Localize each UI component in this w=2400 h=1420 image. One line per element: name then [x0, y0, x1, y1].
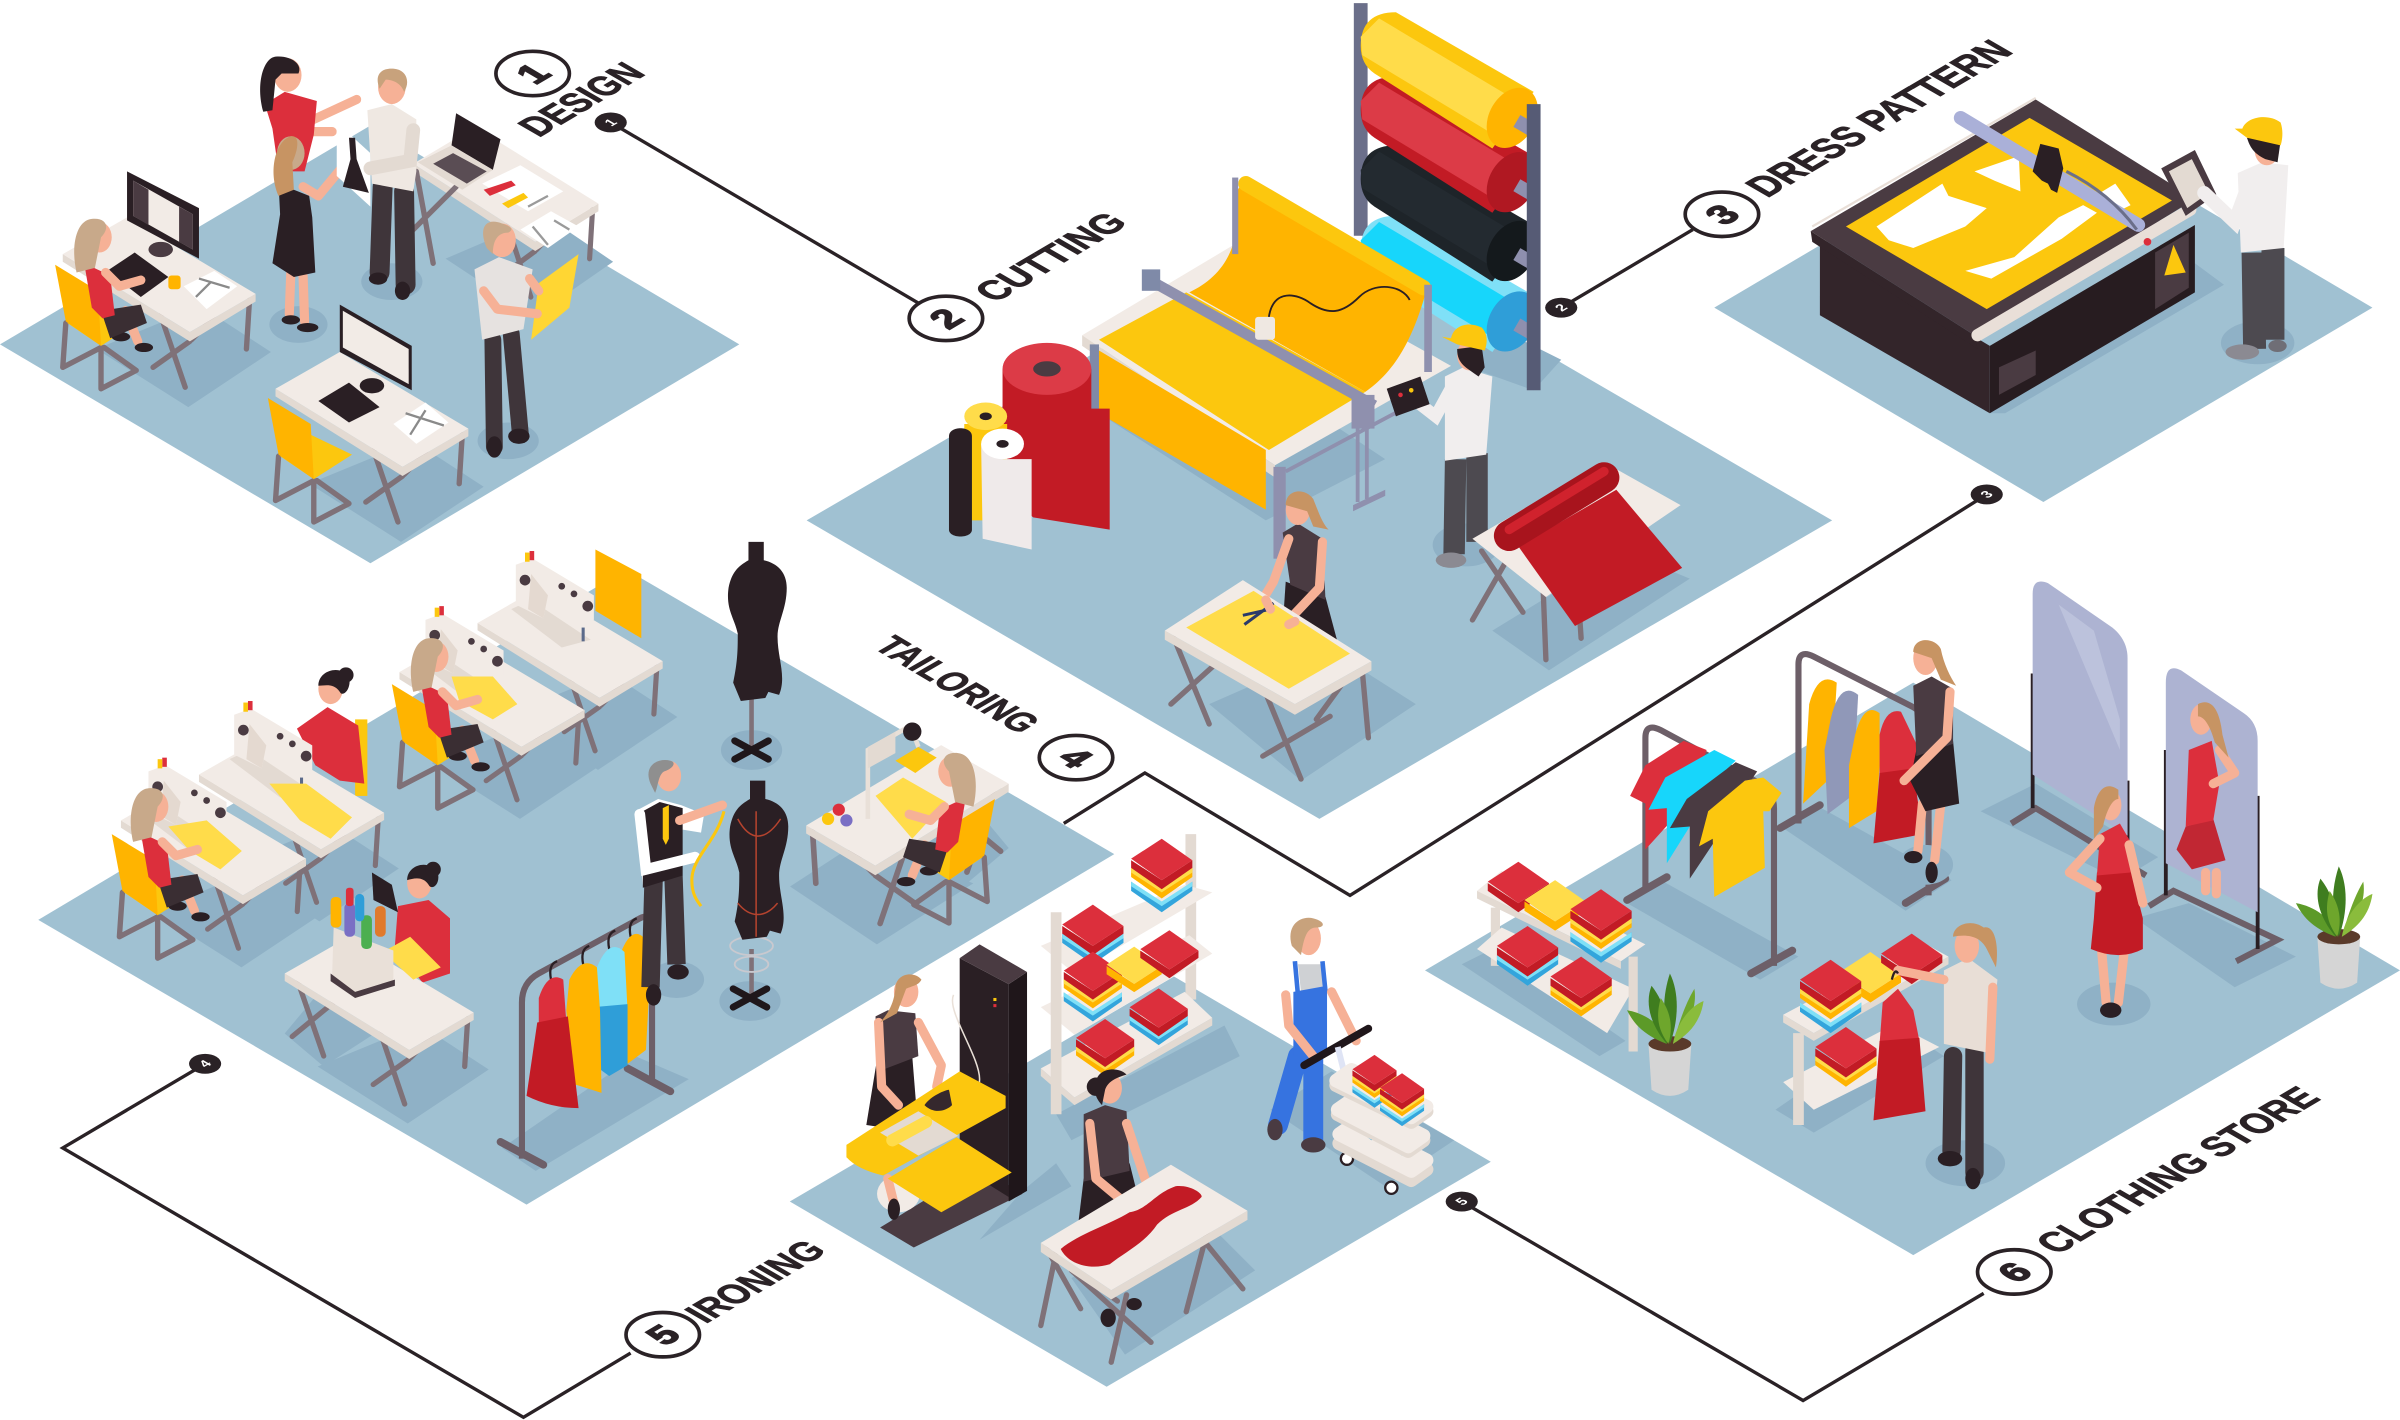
number badge 1: 1 [507, 58, 560, 89]
number badge 6: 6 [1988, 1257, 2041, 1288]
number badge 3 [1685, 192, 1759, 236]
connector dot 3: 3 [1977, 489, 1997, 500]
desk 6 with embroidery machine [790, 722, 1009, 944]
large mirror [1981, 582, 2158, 880]
dress pattern label [1685, 34, 2022, 504]
table with red fabric [1472, 462, 1690, 670]
person: machine operator with yellow cap [2204, 117, 2294, 364]
connector line: step 4 to step 5 [63, 1064, 631, 1417]
panel: dress pattern [1685, 34, 2372, 504]
connector line: step 5 to step 6 [1462, 1202, 1984, 1401]
panel: clothing store [1425, 582, 2400, 1294]
plant at right corner [2296, 866, 2372, 989]
desk 5 with overlock machine and seamstress [285, 862, 489, 1123]
shelf unit with folded stacks [1041, 834, 1240, 1140]
person: machine operator with yellow cap [1387, 325, 1500, 568]
panel: ironing [626, 834, 1491, 1387]
empty yellow chair [268, 398, 352, 522]
garment rack with dresses [501, 917, 689, 1171]
back desk with laptop [413, 113, 613, 317]
connector dot 3 [1971, 484, 2003, 504]
fabric spreading table [1082, 178, 1451, 559]
connector dot 5 [1446, 1192, 1478, 1211]
person: woman cutting fabric [1264, 491, 1338, 738]
mannequin 1 on stand [721, 542, 787, 770]
person: woman with yellow board [474, 222, 579, 459]
panel: tailoring [38, 542, 1114, 1205]
number badge 5: 5 [637, 1319, 690, 1351]
person: worker in blue overalls pushing cart [1267, 918, 1454, 1186]
connector dot 2: 2 [1552, 302, 1571, 313]
rack with four dresses [1780, 654, 1952, 911]
pattern cutting machine [1811, 98, 2224, 413]
center store shelf with stacks [1776, 934, 1948, 1133]
heading: dress pattern: DRESS PATTERN [1735, 34, 2022, 203]
person: saleswoman holding red dress [1873, 923, 2005, 1189]
small mirror with reflection [2135, 668, 2296, 987]
heading: design: DESIGN [509, 57, 654, 142]
number badge 4 [1039, 735, 1113, 780]
person: man holding sketch [361, 69, 422, 300]
empty desk with blank monitor [276, 305, 484, 542]
rack with four shirts [1627, 728, 1798, 980]
number badge 6 [1978, 1250, 2051, 1294]
number badge 4: 4 [1049, 742, 1103, 774]
design floor [0, 126, 739, 563]
heading: cutting: CUTTING [965, 207, 1137, 307]
far yellow chair [595, 549, 641, 638]
desk with monitor and designer [63, 171, 271, 407]
sketch sheet with dress [337, 122, 370, 207]
connector dot 1: 1 [601, 117, 621, 128]
person: woman in black dress [269, 136, 341, 343]
ironing boards and iron [846, 1071, 1012, 1212]
sewing desk 2 with machine [199, 701, 399, 921]
number badge 1 [496, 51, 569, 96]
connector dot 4: 4 [195, 1058, 215, 1070]
panel: cutting [807, 3, 1832, 819]
seated designer and chair [55, 219, 153, 389]
seated seamstress 1 [112, 788, 210, 958]
person: woman in red top [260, 56, 357, 171]
folding table with red dress [1041, 1165, 1255, 1362]
dress pattern floor [1714, 113, 2372, 502]
cutting table with yellow sheet [1165, 580, 1416, 781]
design label [496, 51, 654, 142]
heading: tailoring: TAILORING [865, 631, 1048, 739]
plant near left shelf [1627, 973, 1704, 1096]
seated seamstress at desk 6 [897, 753, 995, 923]
seamstress behind desk 2 [297, 667, 367, 796]
panel: design [0, 51, 739, 563]
cutting label [909, 207, 1577, 341]
folded linen cart [1336, 1047, 1427, 1194]
ironing floor [790, 977, 1491, 1387]
person: woman in red dress [2069, 786, 2151, 1026]
person: woman folding dress [1074, 1069, 1151, 1255]
ironing press machine [880, 944, 1071, 1247]
heading: clothing store: CLOTHING STORE [2025, 1081, 2329, 1259]
connector dot 4 [189, 1054, 221, 1074]
tailoring label [189, 631, 1113, 1074]
number badge 2 [909, 296, 983, 341]
number badge 2: 2 [920, 303, 973, 334]
connector dot 5: 5 [1452, 1196, 1472, 1207]
connector line: step 1 to step 2 [611, 122, 918, 303]
fabric roll rack [1361, 3, 1561, 390]
cutting floor [807, 222, 1832, 819]
tailoring floor [38, 569, 1114, 1205]
left store shelf with stacks [1462, 862, 1645, 1056]
connector line: step 2 to step 3 [1561, 230, 1693, 308]
person: male tailor measuring [635, 760, 724, 1006]
connector dot 2 [1545, 298, 1577, 318]
seated seamstress 3 [392, 638, 490, 808]
mannequin 2 with seam lines [719, 781, 788, 1021]
sewing desk 4 with machine [478, 551, 677, 770]
sewing desk 3 with machine [399, 606, 599, 819]
person: woman in black dress at rack [1898, 640, 1959, 885]
ironing label [626, 1192, 1478, 1357]
clothing store label [1978, 1081, 2329, 1294]
number badge 5 [626, 1313, 699, 1357]
connector line: step 3 to step 4 [1064, 494, 1987, 895]
connector dot 1 [595, 113, 627, 132]
person: woman ironing [866, 974, 941, 1220]
sewing desk 1 with machine [121, 758, 321, 967]
heading: ironing: IRONING [675, 1234, 836, 1328]
left fabric rolls [949, 343, 1110, 549]
number badge 3: 3 [1696, 199, 1749, 230]
clothing store floor [1425, 683, 2400, 1255]
